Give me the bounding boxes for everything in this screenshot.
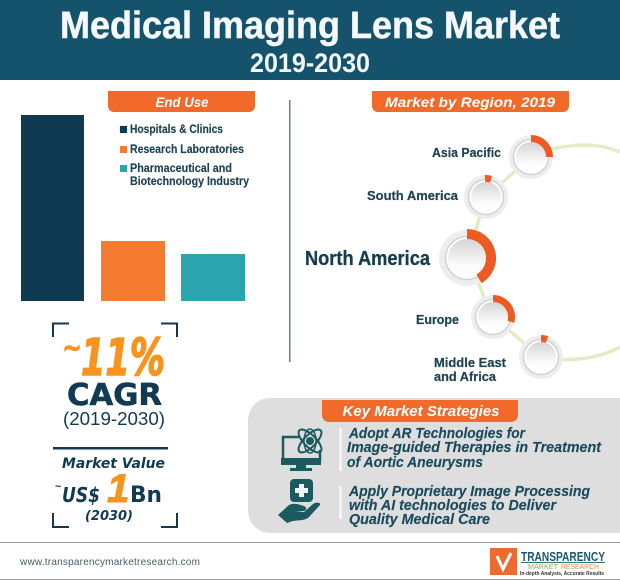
logo: Transparency Market Research: MARKET — [528, 564, 559, 571]
logo: Transparency Market Research: In-depth Analysis, Accurate Results — [520, 571, 604, 577]
text: strategy one: Image-guided Therapies in Treatment — [347, 440, 602, 456]
region: Asia Pacific: Asia Pacific — [432, 145, 501, 160]
legend: end use — [120, 124, 250, 188]
header banner — [0, 0, 620, 80]
heading pill: Market by Region — [372, 91, 569, 112]
region: Middle East and Africa: Middle East — [434, 355, 507, 370]
market value figure: US$ — [62, 483, 100, 507]
title: Medical Imaging Lens Market — [60, 5, 560, 47]
region: Middle East and Africa — [434, 335, 563, 384]
heading pill: End Use — [108, 91, 255, 112]
text: strategy two: Quality Medical Care — [349, 512, 490, 528]
icon: hand with medical plus — [278, 479, 320, 523]
region connector curve — [467, 145, 620, 360]
icon: monitor with atom — [281, 426, 325, 471]
market value figure: Bn — [130, 483, 162, 508]
text: strategy two: with AI technologies to Deliver — [349, 498, 557, 514]
logo: Transparency Market Research: RESEARCH — [561, 564, 599, 571]
footer url: www.transparencymarketresearch.com — [19, 557, 200, 568]
region: South America: South America — [367, 188, 459, 203]
region: Middle East and Africa: and Africa — [434, 369, 497, 384]
bar chart: end use — [21, 115, 245, 301]
heading pill: Key Market Strategies — [322, 400, 518, 422]
legend: end use: Biotechnology Industry — [130, 176, 250, 188]
text: strategy two: Apply Proprietary Image Processing — [348, 484, 590, 500]
CAGR value: ~ — [62, 331, 82, 366]
market value figure: ~ — [55, 481, 62, 493]
heading pill: End Use: End Use — [156, 94, 209, 110]
panel: key market strategies — [248, 398, 620, 533]
text: strategy two — [348, 484, 590, 528]
CAGR label: CAGR — [67, 378, 162, 413]
market value label: Market Value — [62, 456, 165, 472]
text: strategy one — [347, 426, 602, 471]
market value year: (2030) — [85, 509, 133, 524]
legend: end use: Pharmaceutical and — [130, 163, 232, 175]
text: strategy one: Adopt AR Technologies for — [348, 426, 526, 442]
region: North America — [305, 230, 495, 286]
callout: CAGR and market value — [53, 324, 177, 527]
heading pill: Key Market Strategies: Key Market Strategies — [342, 403, 500, 420]
logo: Transparency Market Research — [490, 548, 605, 577]
subtitle: 2019-2030 — [250, 48, 370, 78]
text: strategy one: of Aortic Aneurysms — [347, 455, 483, 471]
region: Europe — [416, 295, 515, 339]
legend: end use: Research Laboratories — [130, 144, 244, 156]
legend: end use: Hospitals & Clinics — [130, 124, 223, 136]
market value figure: 1 — [107, 467, 129, 511]
region: Asia Pacific — [432, 135, 553, 179]
region: North America: North America — [305, 248, 431, 270]
CAGR value — [62, 329, 165, 388]
region: South America — [367, 175, 508, 219]
market value figure — [55, 467, 162, 511]
region: Europe: Europe — [416, 312, 459, 327]
heading pill: Market by Region: Market by Region, 2019 — [385, 94, 555, 110]
CAGR period: (2019-2030) — [63, 409, 165, 429]
CAGR value: 11% — [81, 329, 165, 388]
